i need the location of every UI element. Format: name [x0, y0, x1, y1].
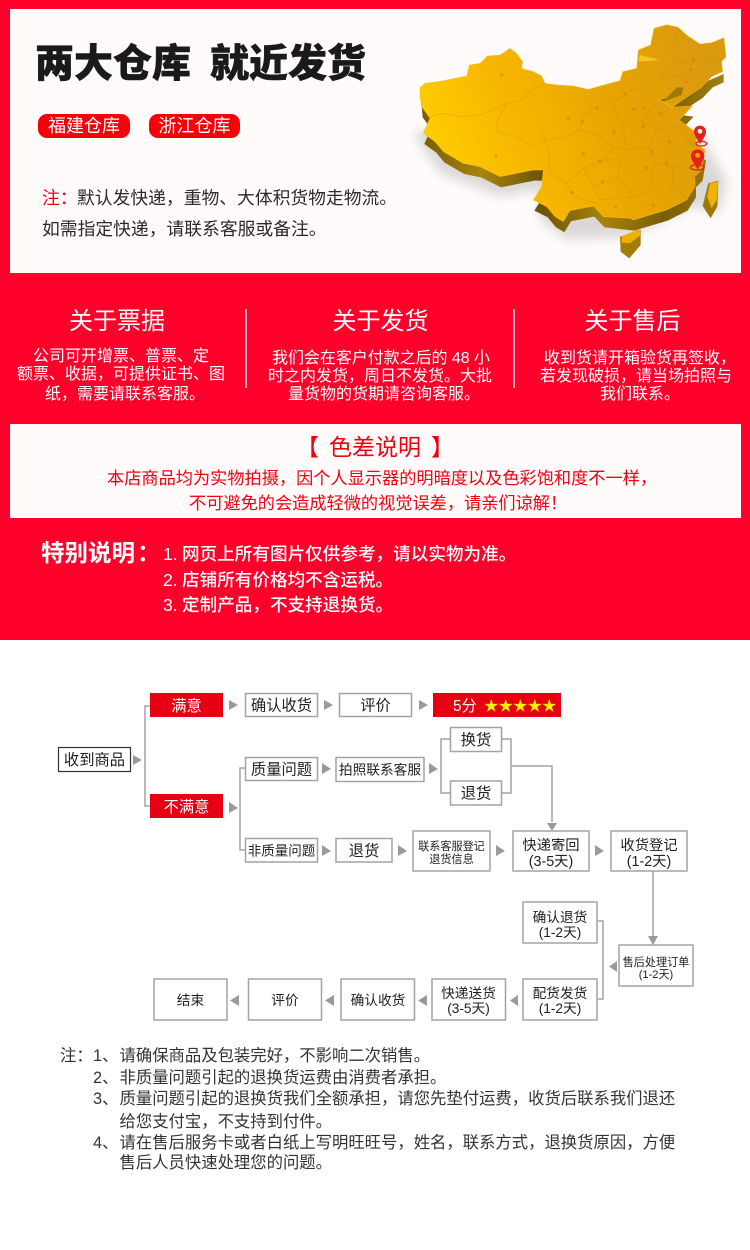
tag: Zhejiang warehouse: 浙江仓库	[158, 116, 230, 136]
box: exchange: 换货	[461, 732, 491, 749]
red background panel	[0, 0, 750, 640]
description: 不可避免的会造成轻微的视觉误差，请亲们谅解！	[189, 493, 567, 513]
box: end: 结束	[177, 993, 204, 1008]
special notes: 网页上所有图片仅供参考，请以实物为准。	[182, 544, 516, 564]
connector lines	[145, 706, 653, 999]
box: quality issue	[246, 758, 318, 780]
description	[107, 468, 657, 513]
box: express return: (3-5天)	[529, 854, 573, 870]
island: Hainan	[620, 229, 641, 258]
box: confirm return: 确认退货	[533, 909, 587, 925]
box: photo and contact	[336, 758, 424, 782]
heading: 】	[431, 434, 454, 460]
special notes: 1.	[163, 544, 178, 564]
special notes: 店铺所有价格均不含运税。	[182, 570, 393, 590]
box: dispatch: (1-2天)	[539, 1001, 581, 1016]
column: shipping: 关于发货	[332, 308, 428, 335]
box: review: 评价	[360, 698, 391, 714]
box: end	[154, 979, 227, 1020]
column: shipping: 量货物的货期请咨询客服。	[288, 385, 480, 403]
box: non-quality issue	[246, 838, 318, 862]
box: return	[450, 781, 502, 805]
box: express return	[513, 831, 589, 871]
box: confirm return	[523, 902, 597, 943]
special notes: 定制产品，不支持退换货。	[182, 595, 393, 615]
box: review	[340, 694, 412, 716]
footnotes: 4、	[93, 1134, 118, 1152]
box: register return	[413, 831, 490, 871]
special notes: 特别说明	[41, 540, 135, 566]
shipping note: 注：	[42, 188, 78, 208]
box: non-quality issue: 非质量问题	[248, 844, 315, 858]
column: after-sales: 若发现破损，请当场拍照与	[540, 367, 732, 385]
column: after-sales: 我们联系。	[600, 385, 680, 403]
column: after-sales: 关于售后	[584, 308, 680, 335]
footnotes: 非质量问题引起的退换货运费由消费者承担。	[120, 1069, 446, 1087]
map of China	[413, 25, 727, 258]
location pin: Fujian	[691, 149, 704, 170]
stars: ★	[498, 699, 513, 715]
stars: ★	[542, 699, 556, 715]
box: express delivery: (3-5天)	[447, 1001, 490, 1016]
panel: warehouses	[10, 9, 741, 273]
special notes: 3.	[163, 595, 178, 615]
box: express delivery: 快递送货	[441, 985, 496, 1001]
box: express delivery	[432, 979, 506, 1020]
tag: Fujian warehouse: 福建仓库	[48, 116, 120, 136]
footnotes: 售后人员快速处理您的问题。	[120, 1154, 332, 1172]
column divider right	[514, 309, 515, 388]
footnotes: 1、	[93, 1047, 118, 1065]
footnotes: 请确保商品及包装完好，不影响二次销售。	[120, 1047, 430, 1065]
box: confirm receipt second: 确认收货	[351, 992, 405, 1008]
heading: 色差说明	[329, 434, 421, 460]
box: express return: 快递寄回	[522, 836, 580, 854]
box: review second: 评价	[271, 993, 299, 1008]
shipping note: 如需指定快递，请联系客服或备注。	[42, 219, 327, 239]
column: invoices: 关于票据	[69, 308, 165, 335]
footnotes: 请在售后服务卡或者白纸上写明旺旺号，姓名，联系方式，退换货原因，方便	[120, 1134, 675, 1152]
column: invoices: 公司可开增票、普票、定	[33, 347, 209, 365]
box: after-sales order: (1-2天)	[639, 969, 673, 981]
box: return non-quality	[336, 838, 392, 862]
box: quality issue: 质量问题	[251, 762, 312, 778]
box: confirm receipt second	[341, 979, 414, 1020]
stars: ★	[513, 699, 528, 715]
column: shipping: 我们会在客户付款之后的 48 小	[272, 349, 490, 367]
title: 就近发货	[210, 43, 366, 86]
box: exchange	[450, 728, 502, 752]
box: register return: 联系客服登记	[418, 839, 485, 853]
island: Taiwan	[703, 181, 718, 218]
box: goods received: 收到商品	[64, 752, 125, 769]
box: confirm receipt	[246, 694, 318, 716]
column: shipping: 时之内发货，周日不发货。大批	[268, 367, 492, 385]
box: receipt register: 收货登记	[620, 837, 678, 854]
province borders	[430, 30, 720, 203]
box: goods received	[58, 748, 130, 772]
panel: colour difference	[10, 424, 741, 518]
box: five stars: 5分	[453, 698, 477, 715]
box: receipt register: (1-2天)	[627, 854, 671, 870]
box: confirm receipt: 确认收货	[251, 698, 312, 714]
tag: Zhejiang warehouse	[149, 114, 240, 138]
special notes	[41, 540, 516, 615]
box: dissatisfied: 不满意	[164, 798, 209, 816]
province dots	[494, 58, 696, 209]
tag: Fujian warehouse	[38, 114, 130, 138]
box: return non-quality: 退货	[349, 843, 379, 860]
heading	[296, 434, 454, 460]
box: register return: 退货信息	[429, 852, 474, 866]
box: satisfied: 满意	[171, 697, 202, 715]
box: confirm return: (1-2天)	[539, 925, 581, 940]
column: shipping	[268, 308, 492, 403]
heading: 【	[296, 434, 319, 460]
box: photo and contact: 拍照联系客服	[339, 762, 421, 778]
box: dispatch: 配货发货	[533, 985, 587, 1001]
location pin: Zhejiang	[694, 126, 707, 146]
special notes: ：	[137, 540, 160, 566]
title: 两大仓库	[35, 43, 191, 86]
title	[35, 43, 366, 86]
description: 本店商品均为实物拍摄，因个人显示器的明暗度以及色彩饱和度不一样，	[107, 468, 657, 488]
footnotes: 质量问题引起的退换货我们全额承担，请您先垫付运费，收货后联系我们退还	[120, 1090, 675, 1108]
box: after-sales order	[619, 945, 693, 986]
box: return: 退货	[461, 786, 491, 802]
box: dissatisfied	[150, 794, 223, 818]
shipping note	[42, 188, 397, 239]
footnotes: 给您支付宝，不支持到付件。	[120, 1113, 332, 1131]
box: receipt register	[611, 831, 687, 871]
column divider left	[246, 309, 247, 388]
box: review second	[248, 979, 322, 1020]
stars: ★	[528, 699, 542, 715]
footnotes: 注：	[60, 1047, 93, 1065]
shipping note: 默认发快递，重物、大体积货物走物流。	[77, 188, 397, 208]
stars: ★	[484, 699, 498, 715]
footnotes: 2、	[93, 1069, 118, 1087]
column: invoices: 纸，需要请联系客服。	[45, 385, 205, 403]
column: after-sales: 收到货请开箱验货再签收，	[544, 349, 736, 367]
flow chart	[58, 693, 693, 1020]
special notes: 2.	[163, 570, 178, 590]
box: after-sales order: 售后处理订单	[623, 955, 689, 969]
box: five stars	[433, 693, 561, 717]
column: after-sales	[540, 308, 736, 403]
column: invoices	[17, 308, 225, 403]
column: invoices: 额票、收据，可提供证书、图	[17, 365, 225, 383]
footnotes: 3、	[93, 1090, 118, 1108]
box: satisfied	[150, 693, 223, 717]
stars	[484, 699, 556, 715]
box: dispatch	[523, 979, 597, 1020]
footnotes	[60, 1047, 675, 1172]
arrows	[133, 700, 658, 1006]
